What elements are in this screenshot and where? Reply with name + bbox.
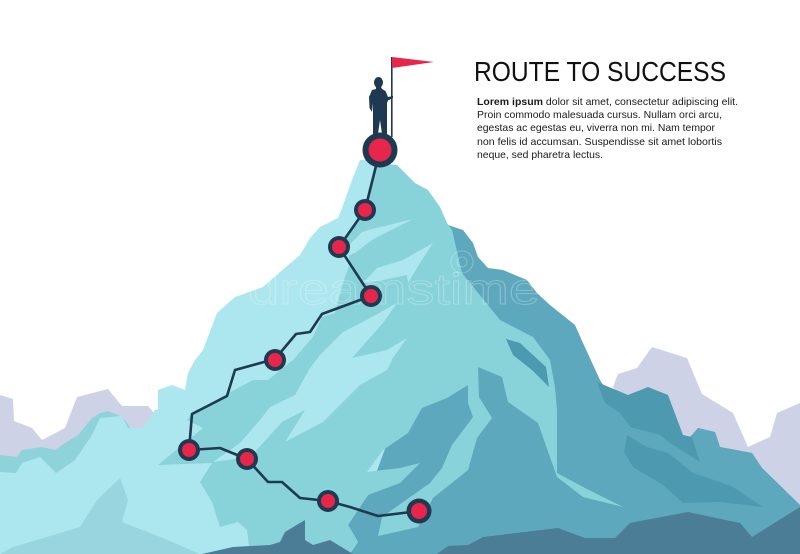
watermark (248, 251, 540, 314)
dark mountain flank (348, 225, 800, 554)
light streak: long lower (213, 303, 407, 462)
route node 4 (360, 285, 382, 307)
body text: egestas ac egestas eu, viverra non mi. Nam tempor (477, 122, 715, 134)
body text: Proin commodo malesuada cursus. Nullam orci arcu, (477, 109, 722, 121)
left foothill shadow (0, 410, 170, 490)
dark ridge on right (597, 382, 700, 462)
route node 2 (354, 199, 376, 221)
route node: summit (362, 132, 398, 168)
route node 5 (264, 349, 286, 371)
title: ROUTE TO SUCCESS (474, 56, 726, 87)
main mountain light face (0, 160, 430, 554)
route node 3 (328, 236, 350, 258)
foreground ridge right (437, 507, 800, 554)
right shoulder of the mountain (692, 428, 800, 510)
body text: Lorem ipsum dolor sit amet, consectetur adipiscing elit. (477, 96, 738, 108)
body text (477, 96, 738, 161)
lower left foothill (0, 478, 200, 554)
light streak: middle (363, 243, 433, 283)
light streak: upper (325, 219, 413, 272)
route node 7 (236, 448, 258, 470)
body text: neque, sed pharetra lectus. (477, 149, 603, 161)
route node 8 (317, 490, 339, 512)
mid teal mountain face (158, 163, 623, 554)
route node 6 (178, 439, 200, 461)
climbing route line (189, 150, 419, 516)
watermark: dreamstime (248, 265, 540, 314)
inner shadow on right flank (624, 435, 763, 507)
body text: non felis id accumsan. Suspendisse sit amet lobortis (477, 136, 722, 148)
foreground ridge left (202, 520, 353, 554)
route node: start (406, 498, 432, 524)
small diamond shadow (506, 339, 549, 387)
icon: person silhouette (369, 77, 393, 134)
icon: flag (391, 57, 434, 137)
background mountains (0, 347, 800, 520)
